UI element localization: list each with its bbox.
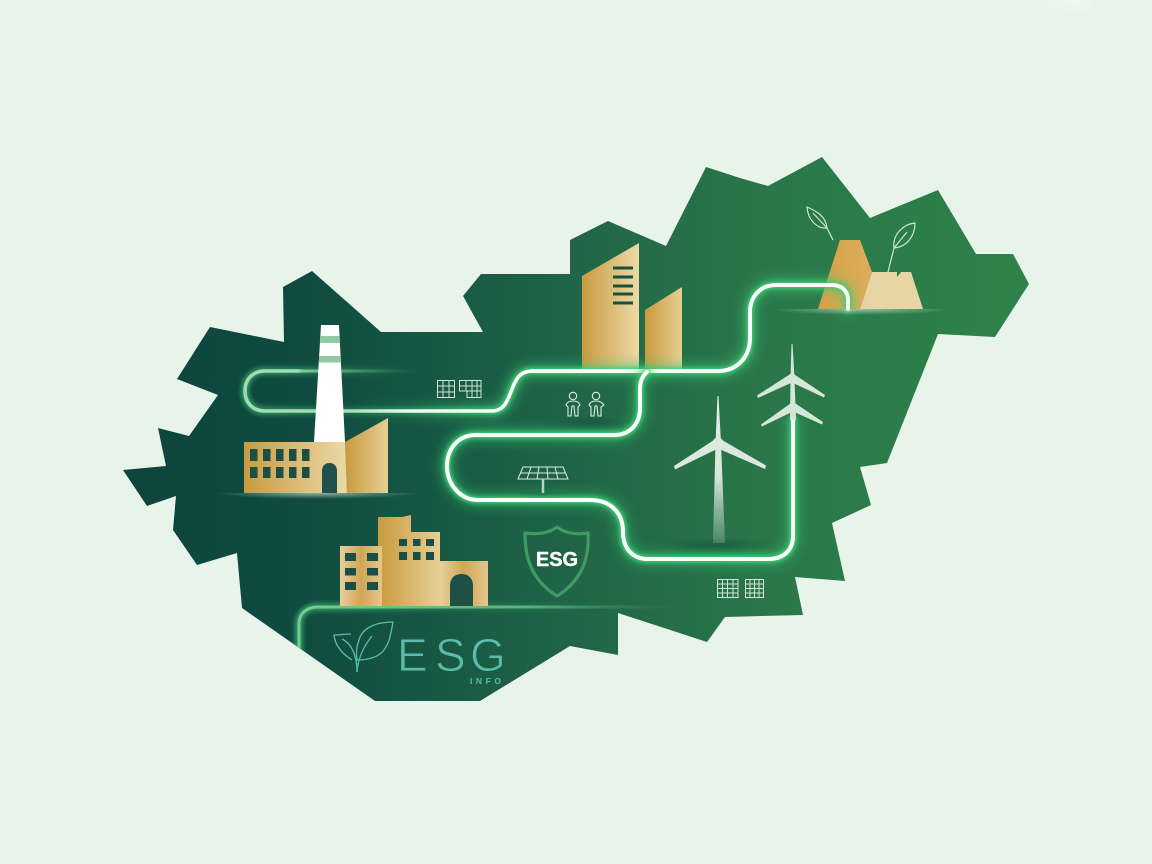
ground line: factory (222, 493, 412, 498)
logo subtitle: INFO (470, 676, 501, 686)
icon: solar grid pair upper (438, 380, 481, 398)
icon: ESG shield: ESG (536, 549, 578, 571)
icon: solar panel (518, 467, 568, 493)
logo wordmark: ESG (397, 629, 506, 681)
wind turbine large (674, 396, 766, 543)
icon: leaf right (888, 223, 915, 272)
chimney (314, 325, 345, 442)
icon: two people (566, 392, 604, 416)
factory with chimney (244, 325, 388, 493)
wind turbine pair (757, 344, 825, 426)
ground line: mountains (780, 309, 944, 314)
icon: small solar grids lower (718, 580, 764, 598)
mountains (818, 240, 923, 309)
map of Hungary (123, 157, 1029, 701)
icon: ESG shield (525, 527, 588, 596)
shadows under icons (513, 416, 780, 554)
top-centre towers (582, 243, 682, 369)
background glow (1043, 0, 1107, 16)
glowing route: lower fading line (299, 607, 680, 660)
ESG info logo (334, 622, 506, 686)
icon: logo leaves (334, 622, 393, 672)
icon: leaf left (807, 207, 833, 240)
lower building (340, 515, 488, 606)
glowing route: branch to wind farm (447, 372, 793, 559)
glowing route: upper loop to mountains (245, 285, 848, 411)
